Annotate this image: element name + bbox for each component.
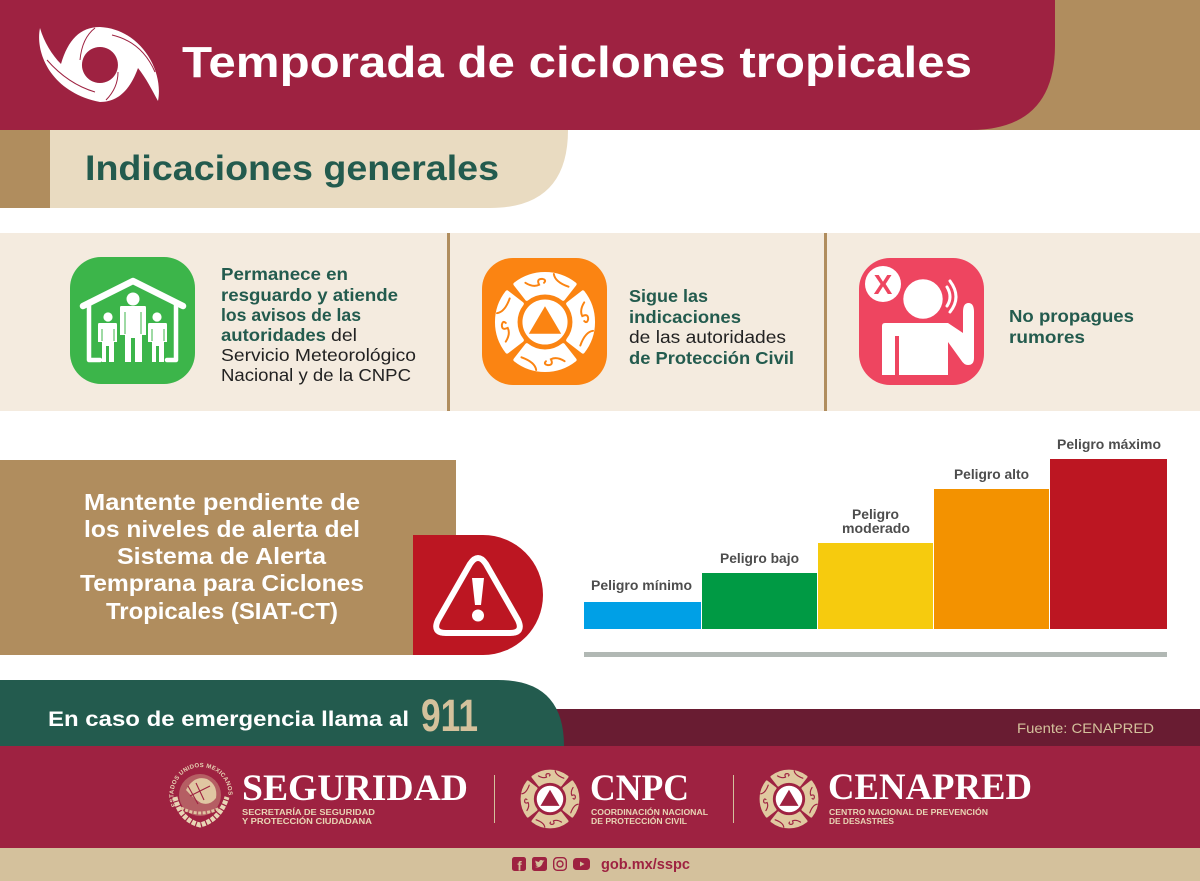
heading: indicaciones generales: Indicaciones generales: [85, 149, 499, 188]
logo: national seal: [169, 762, 233, 828]
logo: cenapred emblem: [761, 771, 817, 827]
emergency text: En caso de emergencia llama al: [48, 708, 409, 731]
text block: no propagues rumores: rumores: [1009, 327, 1085, 347]
bar: peligro moderado: moderado: [842, 521, 910, 536]
text block: permanece en resguardo: Servicio Meteorológico: [221, 345, 416, 365]
text block: permanece en resguardo: los avisos de las: [221, 305, 361, 325]
header band: [0, 0, 1200, 130]
logo: seguridad wordmark: [242, 768, 468, 826]
source band: [540, 709, 1200, 746]
logo: cnpc wordmark: COORDINACIÓN NACIONAL: [591, 806, 708, 817]
logo: cenapred wordmark: CENTRO NACIONAL DE PREVENCIÓN: [829, 806, 988, 817]
logo: cenapred wordmark: [828, 767, 1032, 826]
panel: indications band: [0, 233, 1200, 411]
bar: peligro moderado: [818, 507, 933, 629]
emergency number: 911: [421, 690, 478, 741]
text block: no propagues rumores: [1009, 306, 1134, 347]
logo: cnpc wordmark: [590, 768, 708, 826]
logo: seguridad wordmark: SEGURIDAD: [242, 768, 468, 809]
bar: peligro maximo: [1050, 437, 1167, 629]
logo: national seal: ESTADOS UNIDOS MEXICANOS: [169, 762, 233, 808]
logo: cenapred wordmark: DE DESASTRES: [829, 816, 894, 826]
source note: Fuente: CENAPRED: [1017, 720, 1154, 736]
text block: permanece en resguardo: Nacional y de la CNPC: [221, 365, 411, 385]
text block: sigue las indicaciones: Sigue las: [629, 286, 708, 306]
emergency panel: [0, 680, 564, 746]
bar: peligro alto: Peligro alto: [954, 467, 1029, 482]
website link: gob.mx/sspc: [601, 857, 690, 873]
icon: family sheltered in house: [70, 257, 195, 384]
icon: cyclone logo: [39, 27, 159, 102]
bar: peligro moderado: Peligro: [852, 507, 899, 522]
logo: cenapred wordmark: CENAPRED: [828, 767, 1032, 808]
title: Temporada de ciclones tropicales: [182, 38, 972, 87]
text block: mantente pendiente: Tropicales (SIAT-CT): [106, 598, 338, 624]
text block: sigue las indicaciones: de Protección Civil: [629, 348, 794, 368]
icon: person listening to rumors: [859, 258, 984, 385]
text block: mantente pendiente: Mantente pendiente de: [84, 489, 360, 515]
icon: person listening to rumors: X: [874, 269, 893, 300]
text block: mantente pendiente: Temprana para Ciclones: [80, 570, 364, 596]
text block: permanece en resguardo: [221, 264, 416, 385]
logo: cnpc wordmark: CNPC: [590, 768, 689, 809]
bar: peligro alto: [934, 467, 1049, 629]
bar: peligro minimo: [584, 578, 701, 629]
icon: warning triangle: [413, 535, 543, 655]
logo: cnpc emblem: [522, 771, 578, 827]
bar: peligro bajo: Peligro bajo: [720, 551, 799, 566]
logo: cnpc wordmark: DE PROTECCIÓN CIVIL: [591, 815, 687, 826]
text block: sigue las indicaciones: [629, 286, 794, 368]
text block: sigue las indicaciones: indicaciones: [629, 307, 741, 327]
text block: mantente pendiente: Sistema de Alerta: [117, 543, 326, 569]
panel: alert levels: [0, 460, 456, 655]
bar chart: alert levels: [584, 437, 1167, 629]
text block: mantente pendiente: los niveles de alerta del: [84, 516, 360, 542]
icons: social media: [512, 857, 590, 874]
text block: permanece en resguardo: del: [331, 325, 357, 345]
text block: permanece en resguardo: resguardo y atiende: [221, 285, 398, 305]
bar: peligro bajo: [702, 551, 817, 629]
bar: peligro maximo: Peligro máximo: [1057, 437, 1161, 452]
icons: social media: f: [517, 858, 522, 874]
text block: mantente pendiente: [80, 489, 364, 624]
text block: permanece en resguardo: Permanece en: [221, 264, 348, 284]
logo: seguridad wordmark: SECRETARÍA DE SEGURIDAD: [242, 807, 375, 817]
footer band: [0, 746, 1200, 881]
subheader panel: [0, 130, 568, 208]
logo: seguridad wordmark: Y PROTECCIÓN CIUDADANA: [242, 815, 372, 826]
text block: sigue las indicaciones: de las autoridades: [629, 327, 786, 347]
bar: peligro minimo: Peligro mínimo: [591, 578, 692, 593]
icon: civil protection emblem: [482, 258, 607, 385]
text block: permanece en resguardo: autoridades: [221, 325, 326, 345]
text block: no propagues rumores: No propagues: [1009, 306, 1134, 326]
